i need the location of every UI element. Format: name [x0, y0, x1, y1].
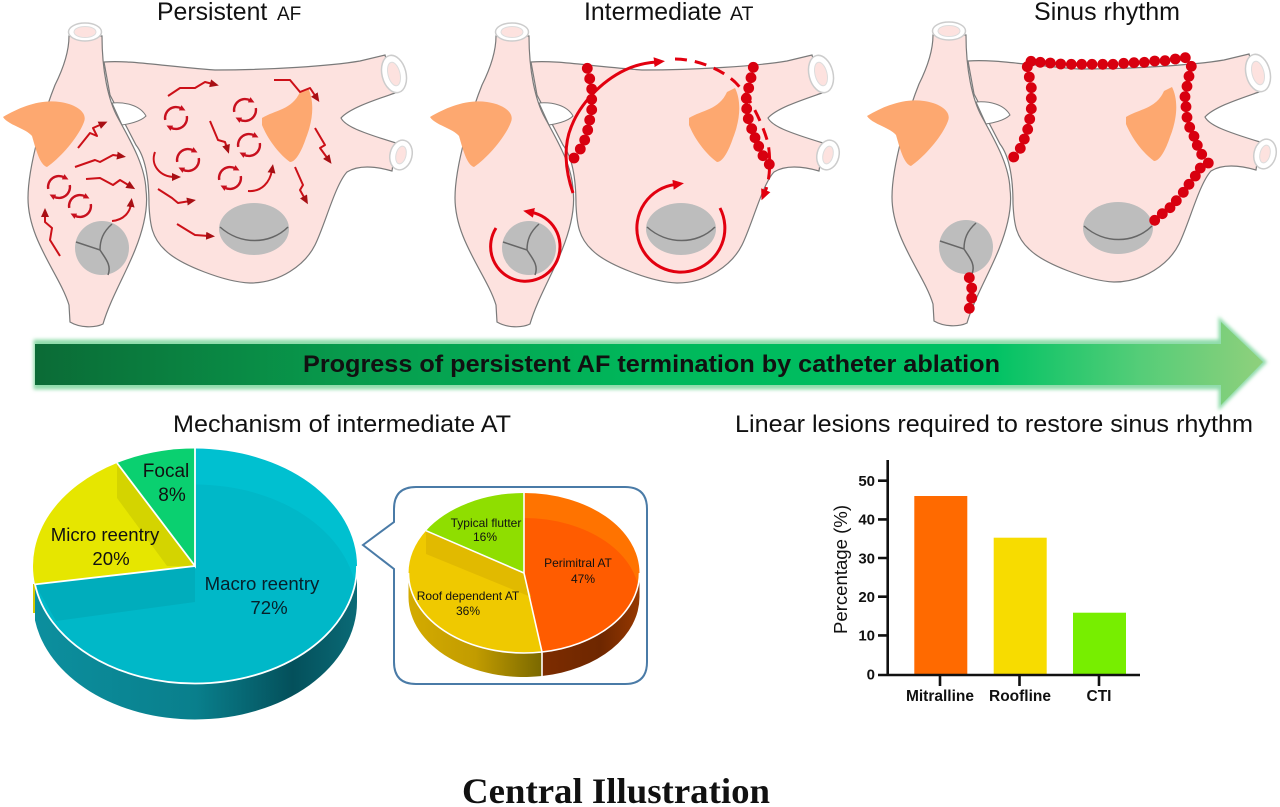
pie chart: macro reentry breakdown: [408, 493, 640, 678]
micro sliver side: [33, 584, 35, 613]
anatomy: [867, 22, 1279, 326]
heading: mechanism: Mechanism of intermediate AT: [173, 411, 511, 438]
arrow caption: Progress of persistent AF termination by catheter ablation: [303, 351, 1000, 378]
mitral circuit arrow: [637, 184, 725, 272]
left pulmonary vein isolation dots: [1008, 61, 1037, 162]
bar chart: linear lesions: [831, 460, 1140, 705]
mitral line lesion dots: [1149, 163, 1206, 226]
roof dependent label: 36%: [456, 604, 480, 618]
y tick labels: 0: [867, 666, 875, 684]
left atrial appendage: [262, 88, 312, 162]
CTI lesion dots: [964, 272, 977, 314]
perimitral label: 47%: [571, 572, 595, 586]
ablation line: right: [741, 62, 775, 170]
x category labels: Mitralline: [906, 688, 974, 705]
reentry circuits: [48, 99, 260, 217]
y axis title: Percentage (%): [831, 505, 851, 634]
typical flutter label: 16%: [473, 530, 497, 544]
perimitral label: Perimitral AT: [544, 556, 613, 570]
title: Persistent AF: AF: [277, 4, 301, 25]
ablation line: left: [569, 63, 597, 163]
y tick labels: 10: [858, 628, 875, 645]
bar: Roofline: [994, 538, 1047, 674]
left atrium: [104, 55, 396, 283]
slice separators: [35, 448, 357, 684]
y tick labels: 30: [858, 550, 875, 567]
roof dependent label: Roof dependent AT: [417, 589, 520, 603]
macro reentry slice: [36, 448, 357, 683]
x category labels: CTI: [1087, 688, 1111, 705]
progress arrow: [35, 320, 1265, 407]
y tick labels: 40: [858, 512, 875, 529]
anatomy: [430, 23, 842, 327]
tricuspid valve: [75, 221, 129, 275]
panel: heart in persistent AF: [3, 23, 415, 327]
right atrial appendage: [3, 101, 85, 167]
axes and ticks: [878, 460, 1140, 686]
perimitral arrow: [566, 62, 656, 193]
tricuspid circuit arrow: [491, 212, 560, 281]
y tick labels: 50: [858, 473, 875, 490]
callout bubble: [363, 487, 647, 684]
x category labels: Roofline: [989, 688, 1051, 705]
y tick labels: 20: [858, 589, 875, 606]
fibrillation wavelets: [45, 80, 328, 256]
panel: heart in sinus rhythm: [867, 22, 1279, 326]
micro reentry label: 20%: [92, 548, 130, 569]
macro reentry label: Macro reentry: [205, 573, 320, 594]
pie side wall: [35, 566, 357, 720]
micro reentry label: Micro reentry: [51, 524, 160, 545]
perimitral slice: [524, 493, 640, 652]
typical flutter slice: [426, 493, 524, 573]
panel: heart in intermediate AT: [430, 23, 842, 327]
focal slice: [117, 448, 195, 566]
mitral valve: [219, 203, 289, 255]
heading: linear lesions: Linear lesions required to restore sinus rhythm: [735, 411, 1253, 438]
focal label: 8%: [158, 485, 186, 506]
vena cava ring: [68, 23, 102, 41]
right atrium: [28, 36, 147, 327]
slice separators: [408, 493, 640, 677]
perimitral side wall: [542, 573, 640, 676]
roof dependent slice: [409, 531, 542, 653]
title: Intermediate AT: AT: [730, 3, 754, 25]
roof dependent side wall: [408, 573, 542, 677]
right pulmonary vein isolation dots: [1180, 61, 1214, 168]
upper pulmonary vein ring: [378, 53, 410, 95]
focal label: Focal: [143, 461, 189, 482]
roofline lesion dots: [1026, 52, 1191, 70]
typical flutter label: Typical flutter: [451, 516, 521, 530]
lower pulmonary vein ring: [387, 138, 415, 172]
bar: Mitralline: [914, 496, 967, 674]
gap between atria: [112, 103, 146, 125]
pie chart: mechanism of intermediate AT: [33, 448, 357, 720]
dashed roof and septal arrow: [675, 59, 770, 192]
micro reentry slice: [33, 463, 195, 584]
bar: CTI: [1073, 613, 1126, 674]
macro reentry label: 72%: [250, 597, 288, 618]
